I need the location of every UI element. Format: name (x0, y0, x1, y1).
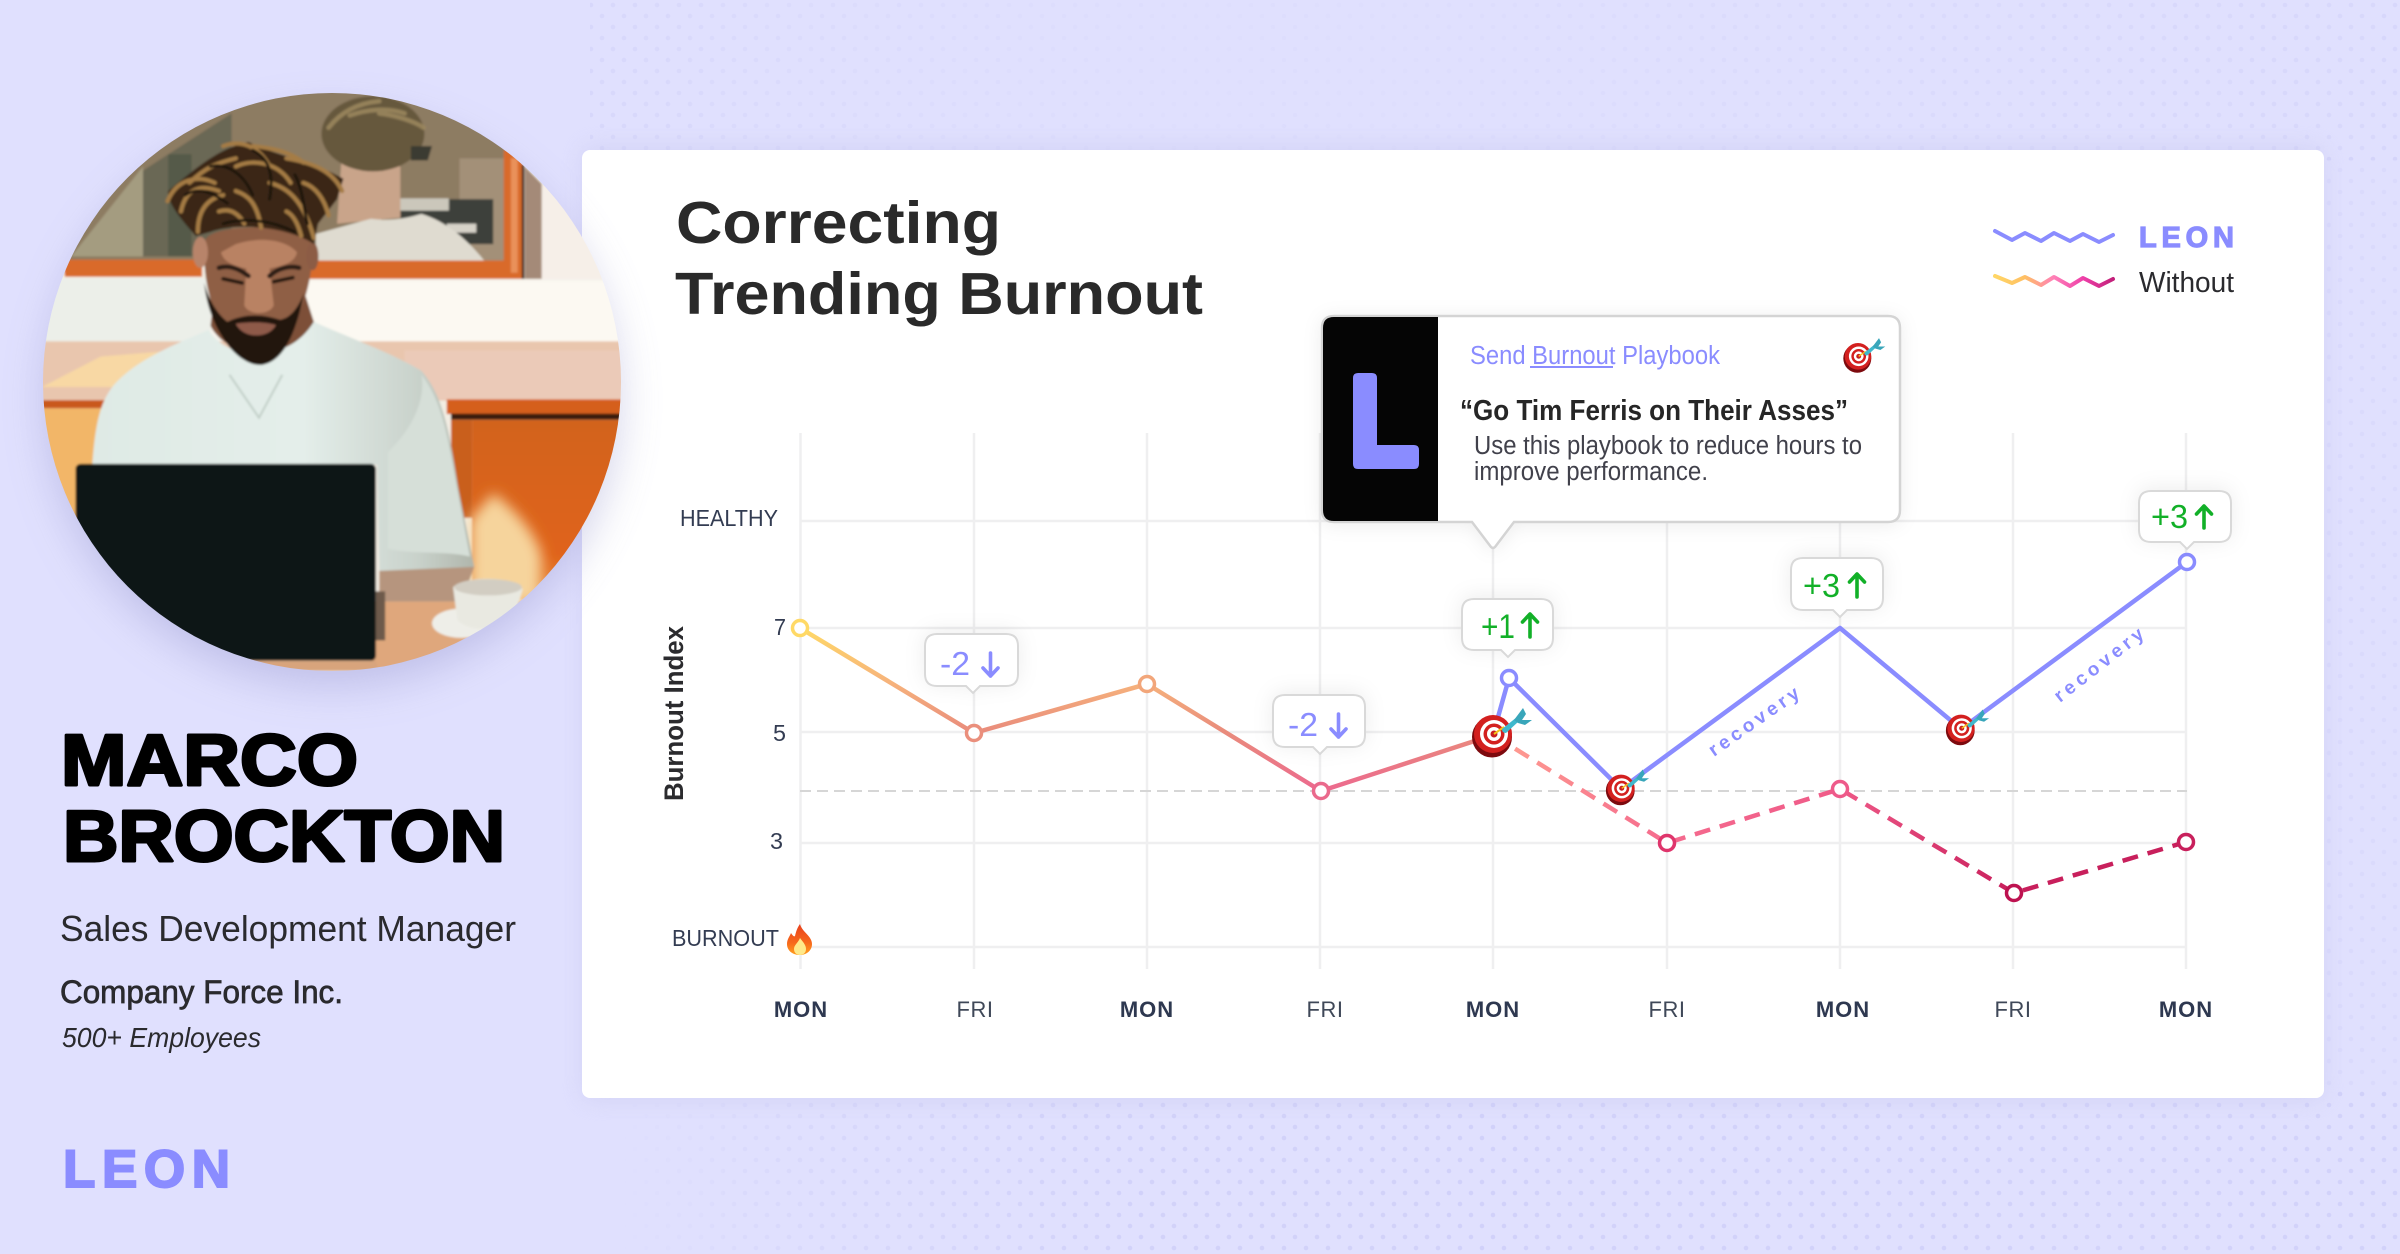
chart grid (800, 433, 2187, 969)
legend (1995, 222, 2234, 299)
name heading (61, 721, 505, 877)
icon: target small (1843, 338, 1885, 373)
y axis labels: 5 (773, 720, 786, 746)
playbook description (1474, 432, 1862, 486)
icon: flame (787, 924, 812, 955)
face (203, 226, 312, 323)
y axis labels: 3 (770, 828, 783, 854)
badge: plus 3 middle (1791, 558, 1883, 617)
panel: chart card (582, 150, 2324, 1098)
playbook link: Send Burnout Playbook (1470, 342, 1720, 370)
laptop (75, 464, 376, 661)
playbook description: Use this playbook to reduce hours to (1474, 432, 1862, 460)
mirror frame (63, 150, 523, 283)
photo shadow (47, 115, 617, 685)
x axis labels: MON (1466, 997, 1520, 1022)
line: LEON recovery (1493, 562, 2187, 789)
title: Trending Burnout (675, 261, 1203, 327)
x axis labels: FRI (1307, 997, 1343, 1022)
badge: plus 3 end (2139, 491, 2231, 549)
badge: plus 3 end: +3 (2151, 498, 2188, 535)
badge: plus 1: +1 (1481, 608, 1515, 646)
threshold dashed line (800, 790, 2187, 792)
y axis labels: 7 (774, 614, 786, 640)
background dot pattern bottom (843, 1092, 2397, 1250)
line: without LEON dashed projection (1493, 735, 2186, 893)
y axis title: Burnout Index (659, 626, 689, 801)
legend line: LEON (1995, 231, 2113, 242)
logo: LEON: LEON (63, 1140, 230, 1199)
saucer (432, 609, 491, 638)
mirror interior (63, 85, 510, 265)
ledge (40, 341, 624, 401)
x axis labels (774, 997, 2213, 1022)
name heading: BROCKTON (63, 797, 505, 877)
x axis labels: FRI (1649, 997, 1685, 1022)
badge: minus 2 second Friday (1273, 695, 1365, 754)
playbook description: improve performance. (1474, 458, 1708, 486)
line: burnout trend (800, 628, 1493, 791)
label: recovery 2: recovery (2050, 624, 2149, 707)
hair (168, 142, 343, 244)
sunlight patch (470, 493, 542, 604)
legend label: Without: Without (2139, 267, 2234, 299)
cabinet strip (40, 400, 105, 408)
badge: minus 2 Friday: -2 (940, 645, 970, 682)
x axis labels: MON (1816, 997, 1870, 1022)
logo L mark (1353, 373, 1419, 469)
cup (453, 579, 523, 629)
badge: minus 2 Friday (925, 634, 1018, 693)
company name: Company Force Inc. (60, 974, 343, 1010)
job title: Sales Development Manager (60, 908, 516, 949)
badge: plus 1 (1462, 599, 1553, 657)
badge: minus 2 second Friday: -2 (1288, 706, 1318, 743)
icon: target large (1472, 708, 1532, 758)
x axis labels: MON (1120, 997, 1174, 1022)
legend line: Without (1995, 276, 2113, 286)
table (371, 600, 520, 668)
x axis labels: MON (2159, 997, 2213, 1022)
x axis labels: FRI (1995, 997, 2031, 1022)
background dot pattern right (2324, 150, 2400, 1100)
background dot pattern top (590, 0, 2400, 160)
name heading: MARCO (61, 721, 358, 801)
logo panel (1323, 317, 1438, 521)
y axis labels: HEALTHY (680, 505, 778, 531)
card shadow (582, 146, 2324, 1101)
callout: playbook popup (1322, 316, 1900, 548)
wall (214, 276, 543, 338)
x axis labels: FRI (957, 997, 993, 1022)
photo: man working on laptop (43, 93, 621, 671)
icon: target medium 2 (1946, 710, 1989, 745)
legend label: LEON: LEON (2139, 222, 2234, 254)
badge: plus 3 middle: +3 (1803, 567, 1840, 604)
y axis labels: BURNOUT (672, 925, 779, 951)
link underline (1530, 366, 1613, 368)
y axis labels (672, 505, 786, 951)
x axis labels: MON (774, 997, 828, 1022)
icon: target medium 1 (1606, 770, 1649, 805)
neck (209, 296, 315, 348)
sweatshirt (92, 322, 474, 578)
label: recovery 1: recovery (1705, 683, 1804, 761)
company size: 500+ Employees (62, 1022, 261, 1053)
cabinets (44, 406, 102, 519)
beard (204, 283, 304, 365)
data points (792, 554, 2194, 900)
title (675, 190, 1203, 327)
title: Correcting (676, 190, 1001, 256)
playbook title: “Go Tim Ferris on Their Asses” (1460, 395, 1848, 427)
